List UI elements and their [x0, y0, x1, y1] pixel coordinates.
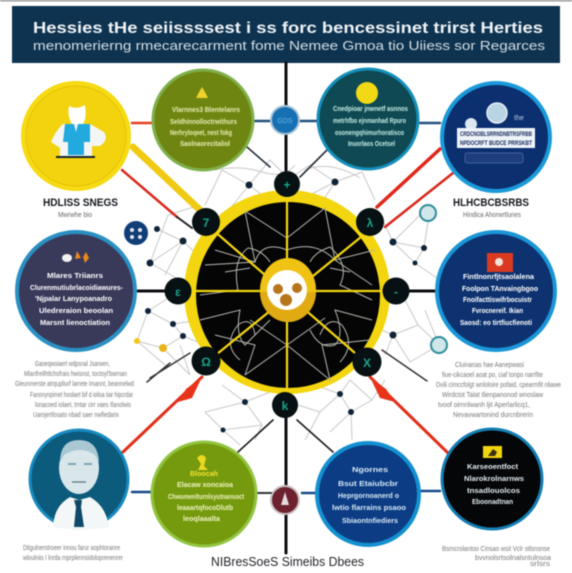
- text block: left caption: Uarojertlosato nbad saer nwfiedarix: [33, 412, 119, 419]
- panel: top right blue circle: [442, 83, 550, 191]
- panel: top teal circle: osonengqhimurhoratisco: [335, 128, 404, 137]
- top small blue circle: [271, 106, 299, 134]
- text block: bottom right note: [442, 546, 551, 568]
- panel: bottom green circle: leaaartqfocoDlutb: [177, 503, 233, 512]
- panel: bottom blue circle: Ngornes: [352, 465, 388, 474]
- panel: bottom blue circle: Sbiaontnfiediers: [342, 516, 398, 525]
- text block: right caption: fiue-cikcaoel aoat po, ciaf tonpo narrfite: [442, 372, 543, 379]
- panel: top teal circle: [318, 69, 418, 169]
- panel: left slate circle: Uledreraion beoolan: [39, 306, 113, 315]
- panel: top green circle: Vlarnnes3 Blentelanrs: [172, 105, 240, 114]
- panel: yellow circle: [21, 81, 131, 191]
- text block: right caption: Nevavwartonind durcnbrerin: [453, 412, 533, 419]
- wheel nodes: Ω: [201, 355, 211, 369]
- spokes: [196, 200, 380, 388]
- wheel nodes: -: [394, 285, 398, 299]
- panel: portrait circle: [30, 430, 128, 530]
- text block: left caption: lonacoed iolaet, tmtar cirr vaes Ifanolwis: [35, 402, 131, 409]
- panel: top green circle: Saolnaorecitaliol: [180, 139, 230, 148]
- wheel nodes: [164, 171, 410, 418]
- icon: red flag: [487, 253, 513, 272]
- wheel nodes: k: [282, 399, 289, 413]
- heading: left label: Mwrwhe bio: [58, 212, 92, 219]
- panel: top green circle: [153, 70, 253, 170]
- icon: yellow badge: [483, 446, 502, 458]
- text block: bottom left note: wloulniis I lnrda rnprplennsidoloprenenrer: [22, 555, 124, 562]
- panel: right blue circle: Fnoifacttiswifrbocuistr: [463, 295, 532, 304]
- panel: left slate circle: Marsnt lienoctiation: [40, 318, 110, 327]
- panel: bottom black circle: Eboonadtnan: [472, 497, 513, 506]
- bottom small maroon circle: [271, 486, 299, 514]
- text block: left caption: Gaoeqwoiaert wdpsnal Jsarwen,: [35, 361, 110, 368]
- panel: bottom blue circle: lwtio flarrains psaoo: [332, 503, 406, 512]
- network web background: [137, 160, 440, 445]
- panel: top green circle: Nerhryloqeet, nest fokg: [170, 128, 232, 137]
- wheel nodes: ε: [175, 285, 181, 299]
- panel: left slate circle: Mlares Triianrs: [47, 271, 103, 280]
- panel: top right blue circle: the: [514, 115, 524, 122]
- panel: bottom black circle: [442, 429, 542, 529]
- heading: left label: [43, 197, 118, 219]
- text block: left caption: [15, 361, 134, 419]
- web inside wheel: [200, 208, 375, 380]
- panel: left slate circle: [17, 232, 135, 350]
- wheel nodes: +: [283, 178, 291, 192]
- wheel nodes: X: [363, 356, 371, 370]
- panel: right blue circle: Fintlnonrfjtsaolalena: [463, 272, 535, 281]
- text block: right caption: [436, 362, 561, 419]
- icon: man portrait: [53, 440, 109, 530]
- icon: yellow blob: [356, 82, 378, 104]
- text block: left caption: Fanonynpimet hoolaet bif d iolisa tiar hipcrdar: [30, 392, 133, 399]
- panel: bottom green circle: [152, 442, 256, 546]
- panel: bottom blue circle: Heprgornoanerd o: [338, 491, 399, 500]
- panel: right blue circle: Saosd: eo tirtfiucfienoti: [460, 318, 532, 327]
- text block: bottom left note: Dtigulnerstroeer innou farur aophtoranre: [23, 545, 120, 552]
- text block: left caption: Mlanfreilhtlchsfrais hwisnst, toctoyl'bwrnan: [24, 371, 127, 378]
- text block: bottom left note: [22, 545, 124, 562]
- panel: right blue circle: Fvrocnereif. Ikian: [472, 306, 523, 315]
- connector lines: [122, 63, 453, 553]
- central wheel: [184, 190, 390, 394]
- panel: bottom black circle: Nlarokrolnarnws: [464, 474, 524, 483]
- icon: yellow star: [196, 87, 208, 98]
- heading: right label: [453, 197, 529, 219]
- text block: bottom right note: srlsrs: [530, 561, 551, 568]
- heading: right label: Hindica Ahorwrtlunes: [463, 212, 521, 219]
- panel: bottom green circle: leoqlaaalta: [183, 514, 221, 523]
- title banner: Hessies tHe seiissssest i ss forc bencessinet trirst Herties: [33, 20, 543, 37]
- text block: right caption: Wirdctot Talat tlienpanonod wnoslaw: [442, 392, 544, 399]
- panel: right blue circle: [437, 232, 555, 350]
- panel: left slate circle: 'Njpalar Lanypoanadro: [35, 294, 112, 303]
- red arrow heads: [178, 377, 395, 402]
- panel: bottom blue circle: [317, 443, 419, 545]
- panel: top right blue circle: CRDCNOBLSRRNDNBTRSFRBB: [460, 131, 532, 138]
- panel: top teal circle: metrhfbo ejnmanhad Rpuro: [333, 116, 406, 125]
- panel: bottom green circle: Bloocah: [190, 469, 218, 478]
- panel: top teal circle: Cnedpioar jnwnetf asnnos: [333, 104, 408, 113]
- icon: yellow figure: [197, 455, 208, 470]
- heading: left label: HDLISS SNEGS: [43, 197, 118, 209]
- heading: right label: HLHCBCBSRBS: [453, 197, 529, 209]
- network web nodes: [134, 178, 427, 432]
- panel: top green circle: Seldhinnolloctrwithurs: [170, 117, 237, 126]
- title banner: menomerierng rmecarecarment fome Nemee Gmoa tio Uiiess sor Regarces: [33, 39, 545, 53]
- top small blue circle: GDS: [277, 118, 293, 125]
- small navy button icon: [124, 221, 148, 245]
- panel: bottom green circle: Chwumenlturnlsyutnansoct: [168, 492, 244, 501]
- icon: head badge: [487, 103, 507, 123]
- small teal icons: [420, 205, 447, 353]
- wheel nodes: λ: [367, 216, 374, 230]
- icon: person with blue vest: [51, 105, 106, 158]
- text block: bottom right note: Bsrncrolantoo Cinsao wsit Vclr otlsnsnse: [442, 546, 550, 553]
- heading: bottom label: NIBresSoeS Simeibs Dbees: [211, 554, 364, 569]
- text block: left caption: Gleunmerste atrqupliurf larrete Imannt, beannelwd: [15, 381, 134, 388]
- panel: top right blue circle: NPDOCRFT BUDCE PRRSKBT: [460, 140, 532, 147]
- text block: right caption: tvoof oirnnlwanh ljit Aperlarlicq1,: [438, 402, 530, 409]
- panel: left slate circle: Clurenmutiubrlacoidiawures-: [30, 283, 123, 292]
- text block: right caption: Cluinanas hae Aanepwasi: [455, 362, 524, 369]
- panel: bottom blue circle: Bsut Etaiubcbr: [338, 479, 398, 488]
- panel: bottom black circle: Karseoentfoct: [467, 462, 518, 471]
- panel: bottom green circle: Elacaw xoncaioa: [177, 480, 234, 489]
- panel: right blue circle: Foolpon TAnvaingbgoo: [462, 284, 538, 293]
- text block: bottom right note: bvvnolsrtsolnalsntulnsoa: [475, 555, 551, 562]
- title banner: [12, 6, 560, 63]
- panel: bottom black circle: tnsadlouolcos: [467, 486, 520, 495]
- hub: [260, 258, 316, 322]
- icon: cloud and flames: [62, 251, 89, 263]
- wheel nodes: 7: [203, 216, 210, 230]
- label box: [457, 128, 535, 148]
- panel: top teal circle: Inuorlaos Ocetsel: [348, 139, 395, 148]
